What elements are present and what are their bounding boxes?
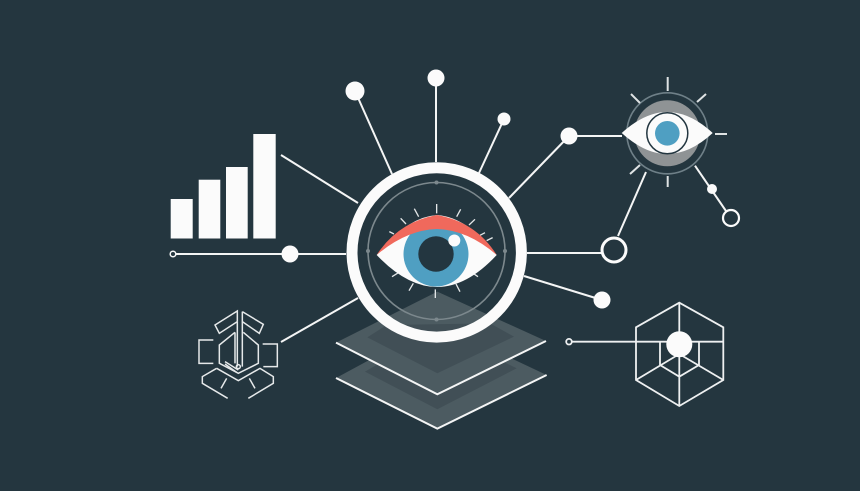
node: upper left — [346, 82, 364, 100]
eye ray ticks — [389, 204, 493, 298]
lower layer — [336, 323, 547, 429]
lens inner gray ring — [366, 180, 507, 322]
hexagon center node — [666, 331, 692, 357]
stacked layers — [336, 292, 547, 429]
node: lower right — [594, 292, 610, 308]
iris — [404, 222, 468, 286]
highlight — [448, 234, 460, 246]
pupil — [418, 236, 454, 272]
small eye branch — [695, 166, 739, 226]
bar chart — [171, 134, 276, 238]
node: link to small eye — [560, 128, 578, 144]
hexagon cube icon — [566, 303, 723, 406]
node: upper right small — [498, 112, 510, 126]
lens outer white ring — [352, 168, 521, 337]
node: left line middle — [282, 246, 298, 262]
node: right open ring — [602, 238, 626, 262]
network cluster icon — [199, 311, 277, 398]
main eye — [377, 215, 497, 287]
node: left line end — [170, 251, 176, 257]
connector lines — [176, 78, 646, 342]
node: top — [428, 70, 444, 86]
small eye icon — [622, 77, 727, 187]
central lens — [352, 168, 521, 337]
upper layer — [336, 292, 546, 394]
small line end ring — [566, 339, 572, 345]
upper lid — [377, 215, 497, 255]
